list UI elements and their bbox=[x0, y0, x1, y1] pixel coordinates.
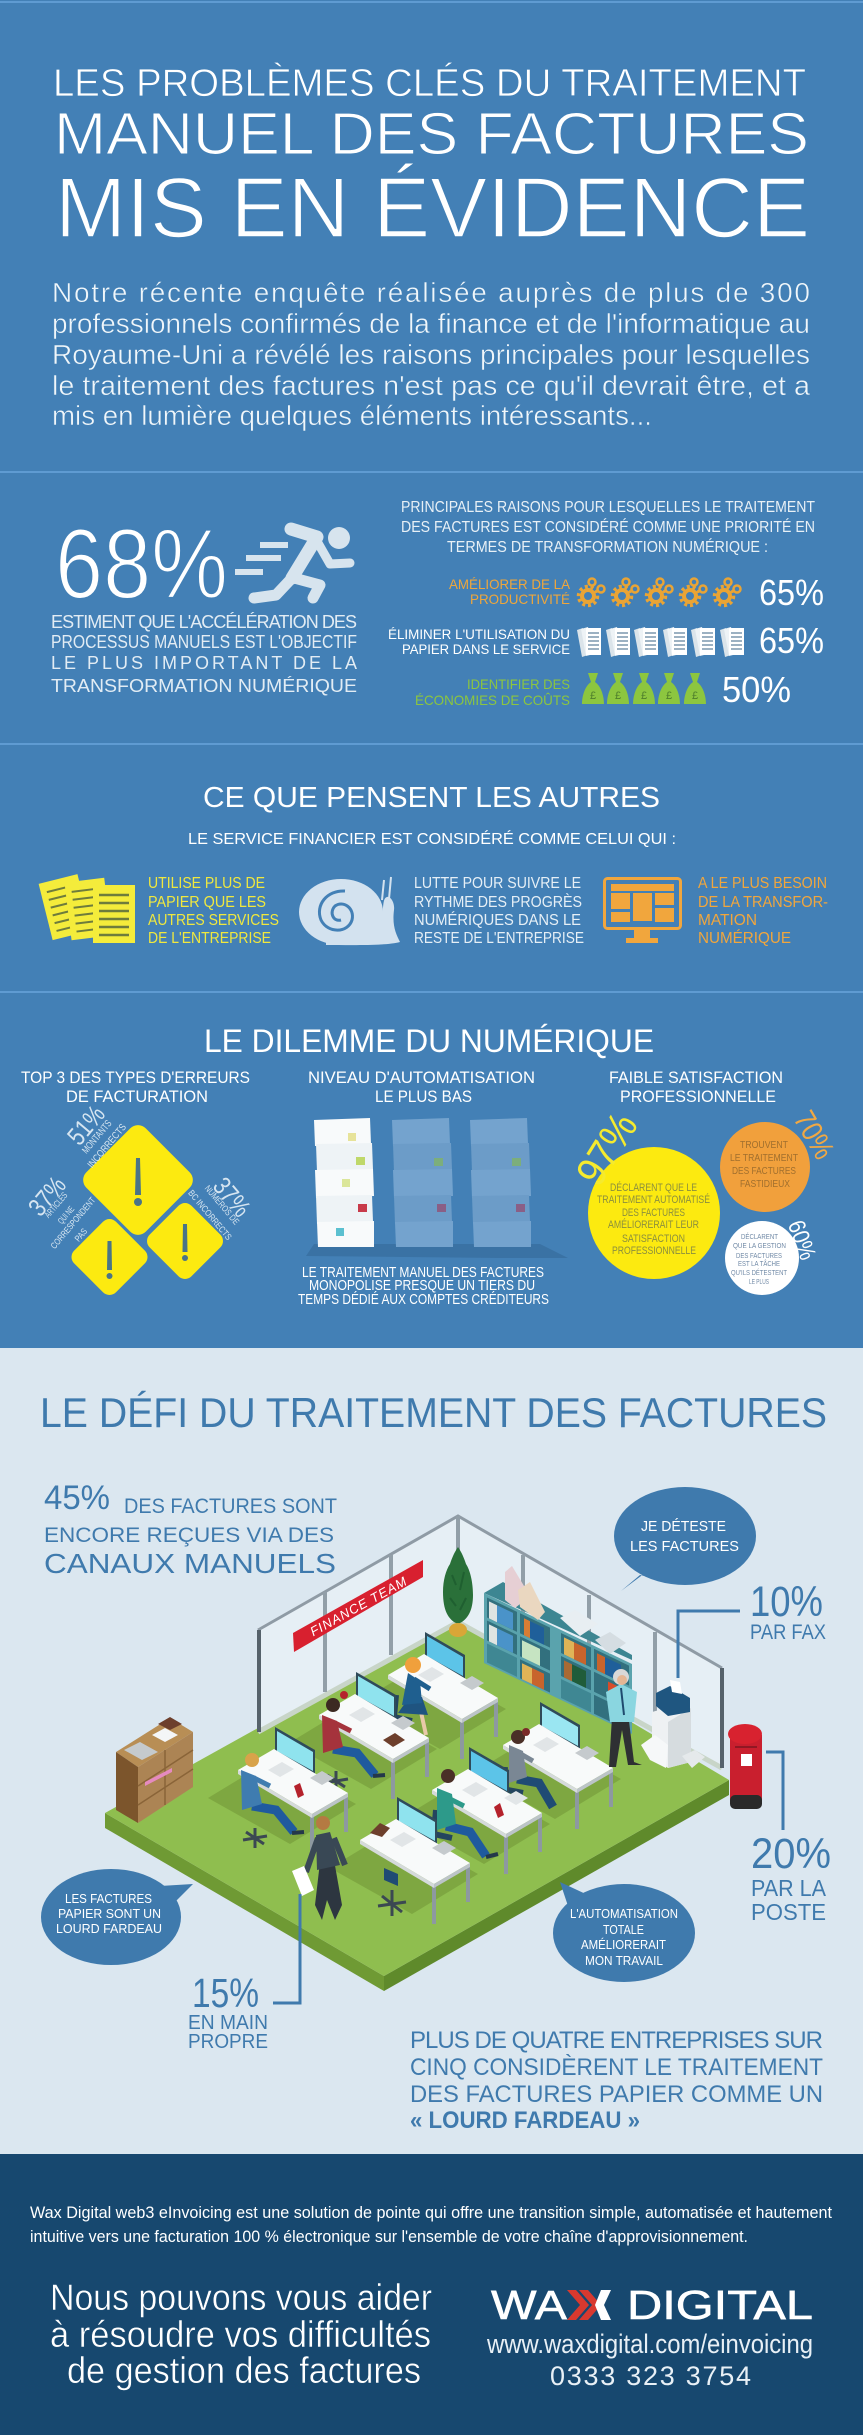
stack 2 bbox=[392, 1118, 453, 1247]
circle: 60% white: EST LA TÂCHE bbox=[738, 1259, 780, 1268]
text: heavy burden conclusion: PLUS DE QUATRE ENTREPRISES SUR bbox=[410, 2027, 823, 2054]
heading: LE DÉFI DU TRAITEMENT DES FACTURES bbox=[40, 1389, 827, 1436]
panel: what others think bbox=[39, 782, 828, 947]
text: 45% manual channels bbox=[44, 1479, 337, 1579]
person: walking man bbox=[292, 1816, 345, 1920]
icon: running man bbox=[235, 527, 350, 598]
text: website: www.waxdigital.com/einvoicing bbox=[486, 2329, 813, 2359]
heading: main reasons: PRINCIPALES RAISONS POUR LESQUELLES LE TRAITEMENT bbox=[401, 499, 815, 516]
callout: paper invoices burden: PAPIER SONT UN bbox=[58, 1906, 161, 1921]
callout: paper invoices burden: LOURD FARDEAU bbox=[56, 1921, 162, 1936]
row: paper elimination bbox=[388, 620, 824, 661]
callout: automation bbox=[553, 1882, 695, 1982]
icon: filing cabinet bbox=[116, 1717, 193, 1823]
column heading: satisfaction bbox=[609, 1068, 783, 1106]
text: snail claim: RYTHME DES PROGRÈS bbox=[414, 892, 582, 911]
text: yellow claim: DE L'ENTREPRISE bbox=[148, 930, 271, 947]
callout: paper invoices burden: LES FACTURES bbox=[65, 1891, 152, 1906]
text: yellow claim: PAPIER QUE LES bbox=[148, 894, 266, 911]
intro paragraph bbox=[52, 277, 810, 431]
text: 68% description: PROCESSUS MANUELS EST L'OBJECTIF bbox=[51, 632, 357, 652]
column heading: automation: LE PLUS BAS bbox=[375, 1087, 472, 1106]
callout: automation: AMÉLIORERAIT bbox=[581, 1937, 666, 1952]
stat: 37% mismatched items: QUI NE bbox=[56, 1204, 76, 1226]
text: product description bbox=[30, 2203, 832, 2246]
column heading: automation bbox=[308, 1068, 535, 1106]
illustration: isometric office bbox=[105, 1515, 762, 1991]
desk: back left with woman bbox=[358, 1632, 506, 1759]
heading: CE QUE PENSENT LES AUTRES bbox=[203, 782, 660, 814]
circle: 70% orange: FASTIDIEUX bbox=[740, 1178, 790, 1190]
intro paragraph: Royaume-Uni a révélé les raisons principales pour lesquelles bbox=[52, 339, 810, 370]
row: cost savings bbox=[415, 669, 791, 710]
text: product description: intuitive vers une facturation 100 % électronique sur l'ensemble de votre chaîne d'approvisionnement. bbox=[30, 2227, 748, 2246]
stack 3 bbox=[470, 1118, 531, 1247]
text: monitor claim bbox=[698, 875, 828, 947]
circle: 97% yellow: 97% bbox=[567, 1104, 647, 1193]
stat: 15% by hand: PROPRE bbox=[188, 2031, 268, 2053]
logo: wax digital: DIGITAL bbox=[627, 2282, 813, 2328]
icon: money bags: £ bbox=[692, 690, 698, 702]
text: call to action: à résoudre vos difficultés bbox=[50, 2314, 431, 2355]
circle: 97% yellow: AMÉLIORERAIT LEUR bbox=[608, 1218, 699, 1231]
circle: 70% orange: LE TRAITEMENT bbox=[730, 1152, 798, 1164]
row: cost savings: ÉCONOMIES DE COÛTS bbox=[415, 692, 570, 708]
heading: main reasons: DES FACTURES EST CONSIDÉRÉ COMME UNE PRIORITÉ EN bbox=[401, 517, 815, 536]
text: snail claim: LUTTE POUR SUIVRE LE bbox=[414, 875, 581, 892]
icon: post box bbox=[728, 1724, 762, 1809]
stat: 20% by post: PAR LA bbox=[751, 1875, 827, 1901]
subheading: LE SERVICE FINANCIER EST CONSIDÉRÉ COMME CELUI QUI : bbox=[188, 829, 676, 848]
person: standing man bbox=[606, 1669, 642, 1767]
text: manual processing caption bbox=[298, 1265, 549, 1308]
text: 68% description: LE PLUS IMPORTANT DE LA bbox=[51, 653, 357, 673]
callout: je deteste les factures: LES FACTURES bbox=[630, 1538, 739, 1555]
icon: money bags: £ bbox=[666, 690, 672, 702]
text: 45% manual channels: DES FACTURES SONT bbox=[124, 1495, 337, 1518]
text: call to action: de gestion des factures bbox=[67, 2350, 421, 2391]
stat: 37% incorrect PO numbers: NUMÉROS DE bbox=[203, 1183, 241, 1227]
callout: je deteste les factures bbox=[614, 1487, 756, 1591]
text: call to action bbox=[50, 2277, 432, 2391]
desk: bottom left with man in blue bbox=[208, 1727, 356, 1854]
stat: 20% by post: 20% bbox=[751, 1830, 831, 1878]
circle: 70% orange bbox=[720, 1105, 840, 1212]
circle: 60% white: QU'ILS DÉTESTENT bbox=[731, 1268, 787, 1277]
row: paper elimination: 65% bbox=[759, 620, 824, 661]
stat: 37% mismatched items: 37% bbox=[22, 1170, 72, 1222]
text: manual processing caption: TEMPS DÉDIÉ AUX COMPTES CRÉDITEURS bbox=[298, 1291, 549, 1308]
icon: monitor bbox=[604, 878, 680, 943]
circle: 70% orange: TROUVENT bbox=[740, 1139, 788, 1151]
stat: 15% by hand: EN MAIN bbox=[188, 2012, 268, 2034]
circle: 60% white: 60% bbox=[782, 1217, 821, 1264]
column heading: error types bbox=[21, 1068, 250, 1106]
glass walls bbox=[258, 1515, 722, 1768]
text: heavy burden conclusion bbox=[410, 2027, 823, 2134]
circle: 97% yellow bbox=[567, 1104, 720, 1279]
circle: 70% orange: 70% bbox=[787, 1105, 840, 1165]
circle: 97% yellow: TRAITEMENT AUTOMATISÉ bbox=[597, 1193, 710, 1206]
stack 1: highlighted white bbox=[314, 1118, 374, 1247]
title: MIS EN ÉVIDENCE bbox=[55, 161, 810, 256]
icon: gears bbox=[578, 578, 740, 606]
column heading: satisfaction: FAIBLE SATISFACTION bbox=[609, 1068, 783, 1087]
stat: 15% by hand bbox=[188, 1894, 300, 2053]
callout: automation: L'AUTOMATISATION bbox=[570, 1906, 678, 1921]
circle: 70% orange: DES FACTURES bbox=[732, 1165, 796, 1177]
stat: 51% incorrect amounts bbox=[61, 1099, 129, 1171]
text: 68% description bbox=[51, 612, 357, 696]
text: 68% description: ESTIMENT QUE L'ACCÉLÉRATION DES bbox=[51, 612, 357, 632]
intro paragraph: Notre récente enquête réalisée auprès de plus de 300 bbox=[52, 277, 810, 308]
banner: finance team: FINANCE TEAM bbox=[307, 1574, 409, 1639]
callout: automation: TOTALE bbox=[603, 1922, 644, 1937]
banner: finance team bbox=[293, 1560, 423, 1652]
text: snail claim bbox=[414, 875, 584, 947]
icon: yellow paper sheets bbox=[39, 874, 135, 943]
text: 45% manual channels: CANAUX MANUELS bbox=[44, 1548, 336, 1579]
stat: 10% by fax: 10% bbox=[750, 1578, 823, 1626]
text: heavy burden conclusion: « LOURD FARDEAU » bbox=[410, 2107, 640, 2134]
title: LES PROBLÈMES CLÉS DU TRAITEMENT bbox=[53, 62, 806, 105]
icon: money bags: £ bbox=[615, 690, 621, 702]
icon: snail bbox=[299, 877, 400, 945]
text: heavy burden conclusion: CINQ CONSIDÈRENT LE TRAITEMENT bbox=[410, 2054, 823, 2081]
stat: 51% incorrect amounts: MONTANTS bbox=[80, 1118, 115, 1156]
text: heavy burden conclusion: DES FACTURES PAPIER COMME UN bbox=[410, 2081, 823, 2108]
stat: 37% mismatched items: ARTICLES bbox=[43, 1190, 69, 1220]
desk: back right with woman in grey bbox=[473, 1702, 621, 1829]
heading: main reasons: TERMES DE TRANSFORMATION NUMÉRIQUE : bbox=[447, 537, 768, 556]
text: yellow claim: AUTRES SERVICES bbox=[148, 912, 279, 929]
stat: 10% by fax bbox=[678, 1578, 826, 1678]
text: monitor claim: MATION bbox=[698, 912, 757, 929]
circle: 60% white: DÉCLARENT bbox=[741, 1232, 778, 1241]
chart: paper stacks bbox=[306, 1118, 568, 1258]
statistic: 68%: 68% bbox=[55, 508, 228, 619]
intro paragraph: le traitement des factures n'est pas ce qu'il devrait être, et a bbox=[52, 370, 810, 401]
stat: 37% mismatched items: CORRESPONDENT bbox=[49, 1195, 98, 1251]
column heading: satisfaction: PROFESSIONNELLE bbox=[620, 1087, 776, 1106]
icon: warning diamonds bbox=[68, 1121, 227, 1299]
stat: 51% incorrect amounts: 51% bbox=[61, 1099, 111, 1151]
icon: fax and copier bbox=[641, 1680, 705, 1768]
circle: 97% yellow: PROFESSIONNELLE bbox=[612, 1245, 696, 1257]
title: MANUEL DES FACTURES bbox=[54, 101, 809, 167]
row: productivity: AMÉLIORER DE LA bbox=[449, 576, 571, 592]
text: monitor claim: DE LA TRANSFOR- bbox=[698, 894, 828, 911]
row: productivity bbox=[449, 572, 824, 613]
stat: 37% incorrect PO numbers: BC INCORRECTS bbox=[186, 1188, 234, 1242]
callout: paper invoices burden bbox=[41, 1869, 193, 1965]
stat: 20% by post: POSTE bbox=[751, 1899, 826, 1925]
stat: 15% by hand: 15% bbox=[192, 1970, 259, 2016]
icon: paper stacks bbox=[577, 627, 744, 657]
circle: 60% white: DES FACTURES bbox=[736, 1251, 782, 1260]
row: cost savings: 50% bbox=[722, 669, 791, 710]
stat: 10% by fax: PAR FAX bbox=[750, 1621, 826, 1644]
stat: 20% by post bbox=[751, 1752, 831, 1925]
stat: 37% incorrect PO numbers: 37% bbox=[207, 1171, 257, 1223]
icon: money bags: £ bbox=[641, 690, 647, 702]
panel: digital dilemma bbox=[21, 1023, 840, 1308]
stat: 37% incorrect PO numbers bbox=[186, 1171, 257, 1242]
text: manual processing caption: LE TRAITEMENT MANUEL DES FACTURES bbox=[302, 1265, 544, 1281]
text: phone: 0333 323 3754 bbox=[550, 2361, 751, 2391]
row: paper elimination: PAPIER DANS LE SERVICE bbox=[402, 641, 570, 657]
heading: main reasons bbox=[401, 499, 815, 556]
text: 45% manual channels: 45% bbox=[44, 1479, 110, 1517]
plant bbox=[443, 1547, 473, 1637]
circle: 60% white: QUE LA GESTION bbox=[733, 1241, 786, 1250]
row: productivity: PRODUCTIVITÉ bbox=[470, 591, 570, 607]
panel: footer bbox=[0, 2154, 863, 2435]
heading: LE DILEMME DU NUMÉRIQUE bbox=[204, 1023, 654, 1059]
circle: 97% yellow: SATISFACTION bbox=[622, 1233, 685, 1245]
text: yellow claim bbox=[148, 875, 279, 947]
stat: 51% incorrect amounts: INCORRECTS bbox=[86, 1122, 129, 1171]
circle: 97% yellow: DÉCLARENT QUE LE bbox=[610, 1181, 697, 1194]
intro paragraph: mis en lumière quelques éléments intéressants... bbox=[52, 400, 652, 431]
callout: automation: MON TRAVAIL bbox=[585, 1953, 663, 1968]
row: cost savings: IDENTIFIER DES bbox=[467, 676, 570, 692]
stat: 37% mismatched items: PAS bbox=[73, 1226, 89, 1244]
column heading: error types: TOP 3 DES TYPES D'ERREURS bbox=[21, 1068, 250, 1087]
bookshelf bbox=[484, 1566, 632, 1734]
text: monitor claim: A LE PLUS BESOIN bbox=[698, 875, 827, 892]
column heading: automation: NIVEAU D'AUTOMATISATION bbox=[308, 1068, 535, 1087]
panel: header bbox=[52, 62, 810, 431]
circle: 97% yellow: DES FACTURES bbox=[622, 1207, 685, 1219]
logo: wax digital: WA bbox=[491, 2282, 568, 2328]
text: product description: Wax Digital web3 eInvoicing est une solution de pointe qui offre une transition simple, automatisée et hautement bbox=[30, 2203, 832, 2222]
icon: money bags bbox=[582, 673, 706, 704]
circle: 60% white: LE PLUS bbox=[749, 1277, 769, 1286]
title bbox=[53, 62, 810, 256]
text: snail claim: NUMÉRIQUES DANS LE bbox=[414, 910, 581, 929]
panel: invoice processing challenge bbox=[0, 1348, 863, 2154]
desk: front with empty chair bbox=[330, 1797, 478, 1924]
text: 68% description: TRANSFORMATION NUMÉRIQUE bbox=[51, 676, 357, 696]
callout: je deteste les factures: JE DÉTESTE bbox=[641, 1518, 726, 1535]
desk: bottom right with man in green bbox=[402, 1747, 550, 1874]
circle: 60% white bbox=[725, 1217, 821, 1295]
stat: 37% mismatched items bbox=[22, 1170, 98, 1251]
column heading: error types: DE FACTURATION bbox=[66, 1087, 208, 1106]
panel: transformation priorities bbox=[51, 499, 824, 710]
row: productivity: 65% bbox=[759, 572, 824, 613]
text: call to action: Nous pouvons vous aider bbox=[50, 2277, 432, 2318]
text: yellow claim: UTILISE PLUS DE bbox=[148, 875, 265, 892]
text: monitor claim: NUMÉRIQUE bbox=[698, 928, 791, 947]
text: 45% manual channels: ENCORE REÇUES VIA DES bbox=[44, 1524, 334, 1547]
intro paragraph: professionnels confirmés de la finance et de l'informatique au bbox=[52, 308, 810, 339]
logo: wax digital bbox=[491, 2282, 813, 2328]
text: manual processing caption: MONOPOLISE PRESQUE UN TIERS DU bbox=[309, 1278, 535, 1294]
icon: money bags: £ bbox=[590, 690, 596, 702]
row: paper elimination: ÉLIMINER L'UTILISATION DU bbox=[388, 626, 570, 642]
text: snail claim: RESTE DE L'ENTREPRISE bbox=[414, 930, 584, 947]
floor bbox=[105, 1618, 729, 1991]
desk: middle left with man in red bbox=[289, 1672, 437, 1799]
